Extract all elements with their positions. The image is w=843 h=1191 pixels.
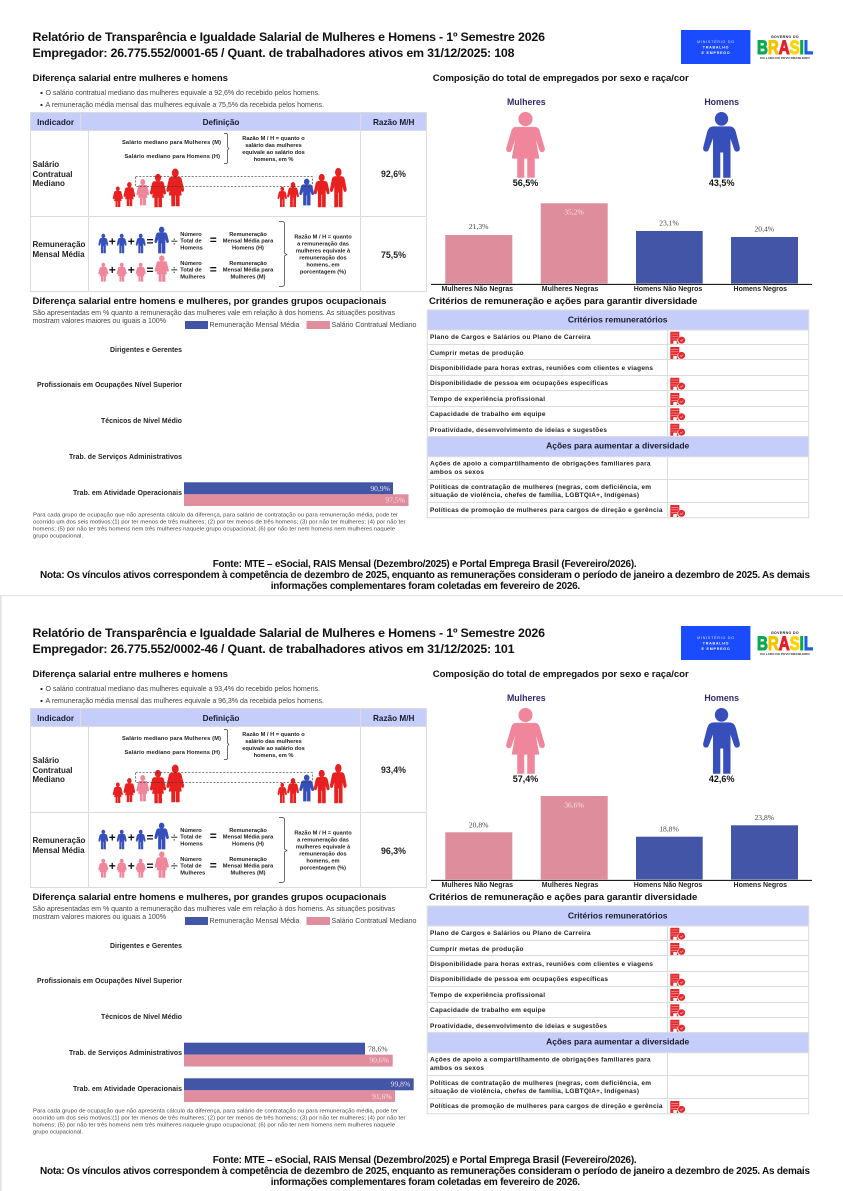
panel: indicator table: Razão M/H [373,118,414,127]
summary bullets: A remuneração média mensal das mulheres equivale a 75,5% da recebida pelos homens. [46,101,324,109]
formula: mulheres: Remuneração [229,857,267,863]
heading: grupos ocupacionais: Diferença salarial entre homens e mulheres, por grandes grupos ocupacionais [32,296,386,307]
panel: indicator table [30,112,426,292]
action rows: Políticas de promoção de mulheres para cargos de direção e gerência [430,1103,663,1110]
bar chart: composição: Mulheres Negras [542,286,598,293]
logo: ministério do trabalho: MINISTÉRIO DO [697,635,735,640]
definition text: salário mediano: Razão M / H = quanto o [242,136,305,142]
icon: mulheres 56,5%: Mulheres [507,97,546,107]
bar chart: occupational groups: Profissionais em Ocupações Nível Superior [37,382,182,389]
criteria rows: Plano de Cargos e Salários ou Plano de Carreira [430,334,591,341]
footnote: grupo ocupacional. [33,534,83,540]
formula: homens: Número [180,232,202,238]
source note [40,559,810,592]
title: Empregador: 26.775.552/0001-65 / Quant. de trabalhadores ativos em 31/12/2025: 108 [32,46,515,60]
icon: mulheres 56,5% [506,97,546,188]
heading: diferença salarial: Diferença salarial entre mulheres e homens [32,73,228,84]
bracket and ratio definition: Razão M / H = quanto [294,830,352,836]
value: 92,6%: 92,6% [381,169,406,179]
logo: ministério do trabalho: TRABALHO [703,46,729,50]
action rows: situação de violência, chefes de família, LGBTQIA+, Indígenas) [430,1088,639,1095]
formula: homens: + [109,830,116,844]
icon: homens 43,5% [703,97,740,188]
icon: homens 42,6%: 42,6% [709,774,734,784]
formula: mulheres: + [109,859,116,873]
bar chart: occupational groups: Trab. em Atividade Operacionais [73,490,182,497]
bar chart: occupational groups: Dirigentes e Gerentes [110,943,182,950]
formula: mulheres: Mulheres [180,274,205,280]
definition text: salário mediano [122,730,305,760]
formula: homens: Total de [180,835,202,841]
formula: mulheres [99,852,274,877]
chart legend: Remuneração Mensal Média [210,917,300,925]
bar chart: occupational groups: 91,6% [372,1092,392,1101]
logo: governo do brasil: DO LADO DO POVO BRASILEIRO [760,56,810,60]
definition text: salário mediano: Salário mediano para Mulheres (M) [122,140,221,146]
source note: informações complementares foram coletadas em fevereiro de 2026. [271,1177,580,1188]
row label: remuneração mensal média: Mensal Média [32,250,85,259]
footnote: ocorrido um dos seis motivos:(1) por ter menos de três mulheres; (2) por ter menos de três homens; (3) por não ter mulheres; (4) por não ter [33,1116,406,1122]
bracket and ratio definition: a remuneração das [297,242,349,248]
heading: critérios: Critérios de remuneração e ações para garantir diversidade [429,892,697,903]
title: Empregador: 26.775.552/0002-46 / Quant. de trabalhadores ativos em 31/12/2025: 101 [32,642,515,656]
definition text: salário mediano: Salário mediano para Homens (H) [124,154,220,160]
row label: remuneração mensal média: Remuneração [32,836,86,845]
criteria rows: Capacidade de trabalho em equipe [430,411,546,418]
icon: action mark [670,1101,685,1113]
logo: governo do brasil: GOVERNO DO [771,631,799,635]
bracket and ratio definition: porcentagem (%) [300,270,346,276]
bar chart: composição: Homens Negros [734,286,787,293]
formula: mulheres: Mulheres (M) [230,870,266,876]
formula: homens: ÷ [171,234,178,248]
bar chart: composição: 35,2% [564,207,584,216]
formula: mulheres [99,256,274,281]
logo: ministério do trabalho: E EMPREGO [702,51,730,55]
formula: mulheres: Total de [180,268,202,274]
title [32,30,545,60]
logo: governo do brasil: DO LADO DO POVO BRASILEIRO [760,652,810,656]
summary bullets [40,89,324,109]
row label: salário contratual mediano: Contratual [32,170,72,179]
bar chart: occupational groups: Trab. de Serviços Administrativos [69,1050,182,1057]
icon: women family [113,765,184,803]
panel: criteria table: Critérios remuneratórios [568,911,668,921]
criteria rows: Disponibilidade para horas extras, reuniões com clientes e viagens [430,365,653,372]
formula: homens: Mensal Média para [223,239,274,245]
criteria rows [430,334,653,434]
action rows: Ações de apoio a compartilhamento de obrigações familiares para [430,1057,651,1064]
summary bullets: A remuneração média mensal das mulheres equivale a 96,3% da recebida pelos homens. [46,697,324,705]
bar chart: occupational groups: Técnicos de Nível Médio [101,418,182,425]
formula: mulheres: Mulheres (M) [230,274,266,280]
title [32,626,545,656]
bar chart: composição [431,203,812,293]
formula: homens [99,227,274,253]
formula: homens: Homens (H) [232,246,264,252]
footnote: homens; (5) por não ter três homens nem três mulheres naquele grupo ocupacional; (6) por não ter nem homens nem mulheres naquele [33,527,396,533]
icons: criteria marks [670,332,685,436]
bar chart: occupational groups: Profissionais em Ocupações Nível Superior [37,978,182,985]
formula: mulheres: + [128,859,135,873]
bar chart: occupational groups: 78,6% [368,1044,388,1053]
icon: mulheres 57,4%: 57,4% [513,774,538,784]
logo: governo do brasil: BRASIL [757,634,813,655]
panel: indicator table: Definição [203,118,239,127]
criteria rows: Proatividade, desenvolvimento de ideias e sugestões [430,1023,607,1030]
footnote [33,513,406,540]
criteria rows: Capacidade de trabalho em equipe [430,1007,546,1014]
action rows: ambos os sexos [430,469,484,476]
chart intro text: mostram valores maiores ou iguais a 100% [32,317,167,325]
report page 1 [30,30,813,592]
logo: ministério do trabalho: E EMPREGO [702,647,730,651]
definition text: salário mediano [122,134,305,164]
footnote: ocorrido um dos seis motivos:(1) por ter menos de três mulheres; (2) por ter menos de três homens; (3) por não ter mulheres; (4) por não ter [33,520,406,526]
bar chart: occupational groups: 90,9% [370,484,391,493]
bracket and ratio definition: homens, em [306,262,340,268]
icon: homens 42,6% [703,693,740,784]
heading: composição: Composição do total de empregados por sexo e raça/cor [433,669,689,680]
formula: mulheres: ÷ [171,859,178,873]
formula: mulheres: Mensal Média para [223,864,274,870]
formula: homens: Número [180,828,202,834]
action rows: Políticas de promoção de mulheres para cargos de direção e gerência [430,507,663,514]
heading: diferença salarial: Diferença salarial entre mulheres e homens [32,669,228,680]
action rows: situação de violência, chefes de família, LGBTQIA+, Indígenas) [430,492,639,499]
source note: informações complementares foram coletadas em fevereiro de 2026. [271,581,580,592]
definition text: salário mediano: salário das mulheres [245,739,302,745]
criteria rows [430,930,653,1030]
bracket and ratio definition [279,222,352,286]
chart intro text [32,309,395,325]
row label: salário contratual mediano: Contratual [32,766,72,775]
definition text: salário mediano: homens, em % [254,157,293,163]
chart legend [185,917,417,925]
source note: Fonte: MTE – eSocial, RAIS Mensal (Dezembro/2025) e Portal Emprega Brasil (Fevereiro/2026). [213,559,637,570]
icon: mulheres 57,4%: Mulheres [507,693,546,703]
formula: homens: = [146,234,154,248]
bar chart: composição: Mulheres Negras [542,882,598,889]
formula: homens: Remuneração [229,828,267,834]
panel: criteria table: Ações para aumentar a diversidade [546,1037,690,1047]
criteria rows: Disponibilidade de pessoa em ocupações específicas [430,380,608,387]
heading: critérios: Critérios de remuneração e ações para garantir diversidade [429,296,697,307]
action rows: ambos os sexos [430,1065,484,1072]
bracket and ratio definition: Razão M / H = quanto [294,234,352,240]
definition text: salário mediano: salário das mulheres [245,143,302,149]
logo: ministério do trabalho [681,626,751,660]
bracket and ratio definition: a remuneração das [297,838,349,844]
panel: indicator table: Razão M/H [373,714,414,723]
criteria rows: Cumprir metas de produção [430,946,524,953]
bar chart: composição: 21,3% [469,222,489,231]
definition text: salário mediano: equivale ao salário dos [242,150,305,156]
action rows: Ações de apoio a compartilhamento de obrigações familiares para [430,461,651,468]
bracket and ratio definition: mulheres equivale à [296,844,351,850]
formula: mulheres: Total de [180,864,202,870]
chart intro text: mostram valores maiores ou iguais a 100% [32,913,167,921]
icon: men family [278,764,346,803]
icons: criteria marks [670,928,685,1032]
bar chart: occupational groups [37,347,408,506]
summary bullets: O salário contratual mediano das mulheres equivale a 92,6% do recebido pelos homens. [46,89,320,97]
formula: mulheres: Número [180,857,202,863]
bar chart: composição: Homens Não Negros [634,882,702,889]
formula: homens: = [210,233,217,247]
bar chart: composição: 20,4% [754,225,775,234]
definition text: salário mediano: Salário mediano para Homens (H) [124,750,220,756]
icon: women family [113,169,184,207]
formula: homens: + [109,234,116,248]
formula: homens: Homens [180,842,203,848]
report page 2 [30,626,813,1188]
panel: criteria table: Critérios remuneratórios [568,315,668,325]
definition text: salário mediano: homens, em % [254,753,293,759]
action rows [430,1057,663,1110]
formula: homens: = [146,830,154,844]
formula: mulheres: = [210,262,217,276]
chart legend: Remuneração Mensal Média [210,321,300,329]
footnote: Para cada grupo de ocupação que não apresenta cálculo da diferença, para salário de contratação ou para remuneração média, pode ter [33,1109,398,1115]
panel: criteria table [427,906,809,1114]
action rows: Políticas de contratação de mulheres (negras, com deficiência, em [430,484,651,491]
bar chart: occupational groups [37,943,414,1102]
bracket and ratio definition: porcentagem (%) [300,866,346,872]
source note: Fonte: MTE – eSocial, RAIS Mensal (Dezembro/2025) e Portal Emprega Brasil (Fevereiro/2026). [213,1155,637,1166]
bar chart: composição: Homens Negros [734,882,787,889]
icon: action mark [670,505,685,517]
bar chart: occupational groups: Trab. de Serviços Administrativos [69,454,182,461]
chart intro text: São apresentadas em % quanto a remuneração das mulheres vale em relação à dos homens. As situações positivas [32,309,395,317]
formula: homens: Homens (H) [232,842,264,848]
footnote [33,1109,406,1136]
formula: homens: Remuneração [229,232,267,238]
row label: salário contratual mediano: Salário [32,160,59,169]
formula: mulheres: = [146,263,154,277]
bar chart: composição: 18,8% [659,825,679,834]
formula: mulheres: Remuneração [229,261,267,267]
icon: homens 43,5%: Homens [704,97,739,107]
formula: mulheres: ÷ [171,263,178,277]
criteria rows: Cumprir metas de produção [430,350,524,357]
criteria rows: Plano de Cargos e Salários ou Plano de Carreira [430,930,591,937]
definition text: salário mediano: equivale ao salário dos [242,746,305,752]
title: Relatório de Transparência e Igualdade Salarial de Mulheres e Homens - 1º Semestre 2026 [32,626,545,640]
icon: men family [278,168,346,207]
source note [40,1155,810,1188]
title: Relatório de Transparência e Igualdade Salarial de Mulheres e Homens - 1º Semestre 2026 [32,30,545,44]
bar chart: composição: Mulheres Não Negras [442,882,513,889]
chart legend: Salário Contratual Mediano [332,917,417,925]
chart legend: Salário Contratual Mediano [332,321,417,329]
bar chart: composição: 23,1% [659,219,679,228]
action rows [430,461,663,514]
criteria rows: Disponibilidade de pessoa em ocupações específicas [430,976,608,983]
bar chart: occupational groups: 97,5% [385,496,406,505]
icon: mulheres 57,4% [506,693,546,784]
icon: homens 42,6%: Homens [704,693,739,703]
bar chart: occupational groups: Técnicos de Nível Médio [101,1014,182,1021]
row label: salário contratual mediano: Mediano [32,775,65,784]
formula: homens: Homens [180,246,203,252]
bracket and ratio definition: mulheres equivale à [296,248,351,254]
formula: mulheres: Mensal Média para [223,268,274,274]
bar chart: composição: 20,8% [469,820,489,829]
definition text: salário mediano: Salário mediano para Mulheres (M) [122,736,221,742]
bar chart: composição: 36,6% [564,800,584,809]
formula: mulheres: + [128,263,135,277]
value: 75,5%: 75,5% [381,250,406,260]
formula: homens: + [128,234,135,248]
heading: composição: Composição do total de empregados por sexo e raça/cor [433,73,689,84]
formula: homens: ÷ [171,830,178,844]
panel: criteria table: Ações para aumentar a diversidade [546,441,690,451]
logo: ministério do trabalho: TRABALHO [703,642,729,646]
bar chart: occupational groups: Trab. em Atividade Operacionais [73,1086,182,1093]
chart intro text: São apresentadas em % quanto a remuneração das mulheres vale em relação à dos homens. As situações positivas [32,905,395,913]
bar chart: composição: 23,8% [754,813,775,822]
panel: indicator table: Definição [203,714,239,723]
chart intro text [32,905,395,921]
bar chart: composição [431,796,812,889]
formula: mulheres: = [146,859,154,873]
formula: homens: = [210,829,217,843]
value: 96,3%: 96,3% [381,846,406,856]
bar chart: composição: Mulheres Não Negras [442,286,513,293]
icon: homens 43,5%: 43,5% [709,178,734,188]
row label: salário contratual mediano: Mediano [32,179,65,188]
logo: ministério do trabalho: MINISTÉRIO DO [697,39,735,44]
footnote: grupo ocupacional. [33,1130,83,1136]
bar chart: occupational groups: 90,6% [369,1056,390,1065]
formula: mulheres: Mulheres [180,870,205,876]
criteria rows: Disponibilidade para horas extras, reuniões com clientes e viagens [430,961,653,968]
formula: homens: Total de [180,239,202,245]
definition text: salário mediano: Razão M / H = quanto o [242,732,305,738]
summary bullets [40,685,324,705]
formula: mulheres: = [210,858,217,872]
bracket and ratio definition: remuneração dos [299,256,347,262]
source note: Nota: Os vínculos ativos correspondem à competência de dezembro de 2025, enquanto as remunerações consideram o período de janeiro a dezembro de 2025. As demais [40,570,810,581]
formula: mulheres: + [109,263,116,277]
row label: salário contratual mediano: Salário [32,756,59,765]
chart legend [185,321,417,329]
bracket and ratio definition: remuneração dos [299,852,347,858]
panel: criteria table [427,310,809,518]
bar chart: composição: Homens Não Negros [634,286,702,293]
footnote: homens; (5) por não ter três homens nem três mulheres naquele grupo ocupacional; (6) por não ter nem homens nem mulheres naquele [33,1123,396,1129]
heading: grupos ocupacionais: Diferença salarial entre homens e mulheres, por grandes grupos ocupacionais [32,892,386,903]
logo: governo do brasil: BRASIL [757,38,813,59]
panel: indicator table: Indicador [37,118,75,127]
bar chart: occupational groups: 99,8% [391,1080,411,1089]
footnote: Para cada grupo de ocupação que não apresenta cálculo da diferença, para salário de contratação ou para remuneração média, pode ter [33,513,398,519]
formula: homens: Mensal Média para [223,835,274,841]
criteria rows: Proatividade, desenvolvimento de ideias e sugestões [430,427,607,434]
action rows: Políticas de contratação de mulheres (negras, com deficiência, em [430,1080,651,1087]
bracket and ratio definition [279,818,352,882]
summary bullets: O salário contratual mediano das mulheres equivale a 93,4% do recebido pelos homens. [46,685,320,693]
formula: homens [99,823,274,849]
row label: remuneração mensal média: Mensal Média [32,846,85,855]
panel: indicator table [30,708,426,888]
formula: mulheres: Número [180,261,202,267]
logo: governo do brasil: GOVERNO DO [771,35,799,39]
logo: ministério do trabalho [681,30,751,64]
value: 93,4%: 93,4% [381,765,406,775]
bracket and ratio definition: homens, em [306,858,340,864]
formula: homens: + [128,830,135,844]
icon: mulheres 56,5%: 56,5% [513,178,538,188]
criteria rows: Tempo de experiência profissional [430,396,545,403]
source note: Nota: Os vínculos ativos correspondem à competência de dezembro de 2025, enquanto as remunerações consideram o período de janeiro a dezembro de 2025. As demais [40,1166,810,1177]
bar chart: occupational groups: Dirigentes e Gerentes [110,347,182,354]
panel: indicator table: Indicador [37,714,75,723]
criteria rows: Tempo de experiência profissional [430,992,545,999]
row label: remuneração mensal média: Remuneração [32,240,86,249]
